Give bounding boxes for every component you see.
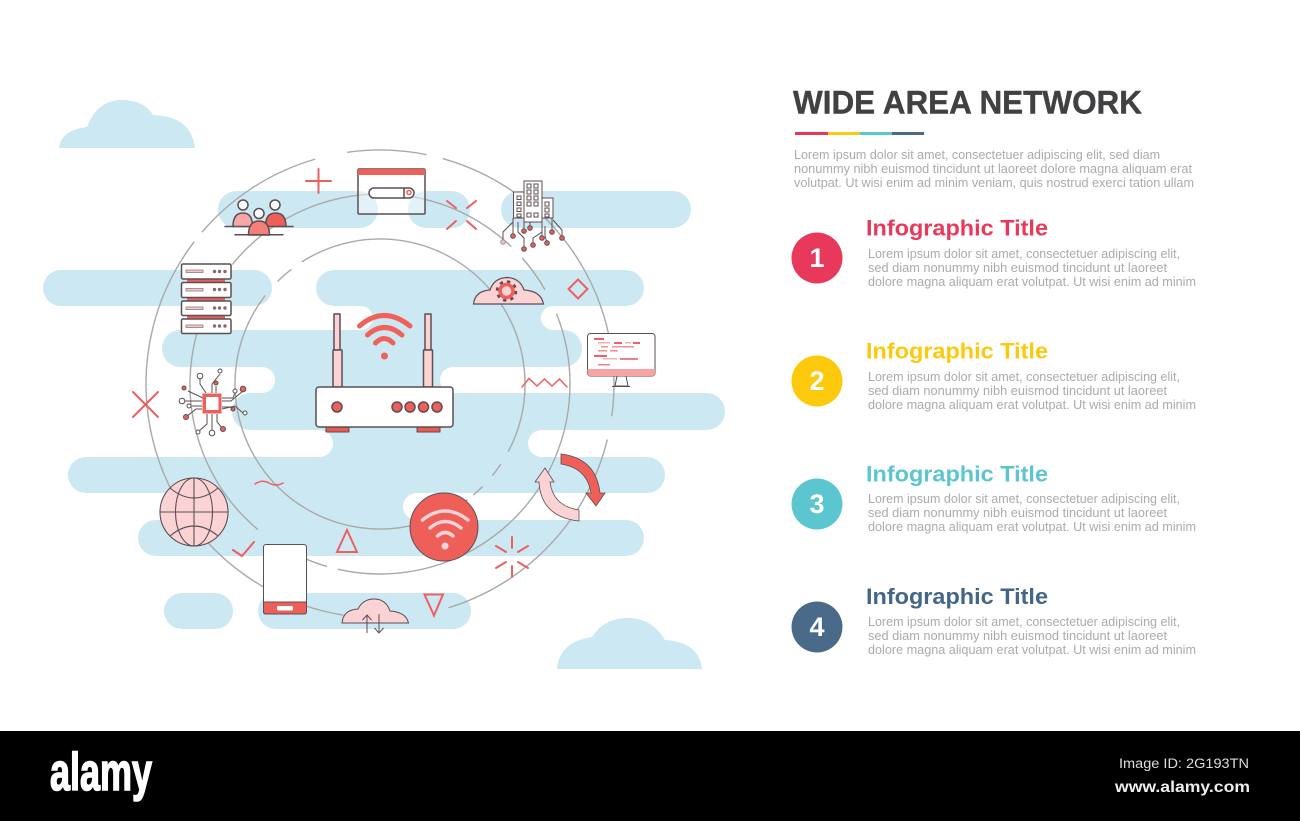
intro text block: Lorem ipsum dolor sit amet, consectetuer adipiscing elit, sed diam — [794, 148, 1160, 162]
number badge 4: 4 — [809, 612, 825, 642]
concentric dashed rings — [97, 101, 663, 667]
intro text block: nonummy nibh euismod tincidunt ut laoreet dolore magna aliquam erat — [794, 162, 1193, 176]
icon: wifi signal above router — [360, 316, 410, 360]
item 3 text: sed diam nonummy nibh euismod tincidunt ut laoreet — [868, 506, 1168, 520]
item 1 — [792, 216, 1196, 289]
icon: microchip — [179, 369, 247, 436]
number badge 4 — [792, 602, 842, 652]
item 2 text: sed diam nonummy nibh euismod tincidunt ut laoreet — [868, 384, 1168, 398]
item 4 heading: Infographic Title — [866, 584, 1048, 609]
icon: monitor with code — [588, 334, 655, 387]
icon: smart city buildings — [501, 181, 564, 251]
icon: cloud with up and down arrows — [342, 599, 408, 633]
number badge 1: 1 — [809, 243, 825, 273]
item 4 text — [868, 615, 1196, 657]
decorative marks: plus, cross, diamond, triangles, squiggles — [133, 169, 588, 616]
item 1 text: Lorem ipsum dolor sit amet, consectetuer adipiscing elit, — [868, 247, 1180, 261]
icon: people group — [225, 200, 293, 235]
item 3 text: Lorem ipsum dolor sit amet, consectetuer adipiscing elit, — [868, 492, 1180, 506]
number badge 2: 2 — [809, 366, 825, 396]
item 1 text: sed diam nonummy nibh euismod tincidunt ut laoreet — [868, 261, 1168, 275]
background: clouds and bands — [43, 100, 738, 669]
icon: cloud with gear — [474, 278, 544, 304]
item 4 text: Lorem ipsum dolor sit amet, consectetuer adipiscing elit, — [868, 615, 1180, 629]
item 1 heading: Infographic Title — [866, 216, 1048, 240]
icon: browser window — [358, 169, 425, 214]
footer bar — [0, 731, 1300, 821]
icon: circular refresh arrows — [535, 454, 605, 521]
item 3 — [792, 462, 1196, 534]
icon: router — [316, 314, 453, 432]
item 2 heading: Infographic Title — [866, 338, 1048, 364]
icon: globe — [160, 478, 228, 546]
item 1 text — [868, 247, 1196, 289]
item 3 text — [868, 492, 1196, 534]
intro text block: volutpat. Ut wisi enim ad minim veniam, quis nostrud exerci tation ullam — [794, 176, 1194, 190]
item 3 heading: Infographic Title — [866, 462, 1048, 486]
item 4 text: dolore magna aliquam erat volutpat. Ut wisi enim ad minim — [868, 643, 1196, 657]
item 3 text: dolore magna aliquam erat volutpat. Ut wisi enim ad minim — [868, 520, 1196, 534]
footer logo: alamy — [50, 743, 152, 802]
item 1 text: dolore magna aliquam erat volutpat. Ut wisi enim ad minim — [868, 275, 1196, 289]
number badge 3 — [792, 478, 842, 530]
intro text block — [794, 148, 1194, 190]
item 4 text: sed diam nonummy nibh euismod tincidunt ut laoreet — [868, 629, 1168, 643]
title underline color bar — [795, 132, 924, 135]
item 2 text — [868, 370, 1196, 412]
number badge 2 — [792, 356, 842, 406]
item 2 text: Lorem ipsum dolor sit amet, consectetuer adipiscing elit, — [868, 370, 1180, 384]
number badge 3: 3 — [809, 489, 825, 519]
footer website: www.alamy.com — [1114, 779, 1250, 796]
item 2 text: dolore magna aliquam erat volutpat. Ut wisi enim ad minim — [868, 398, 1196, 412]
item 4 — [792, 584, 1196, 657]
footer image id: Image ID: 2G193TN — [1119, 756, 1249, 771]
number badge 1 — [792, 232, 842, 284]
icon: wifi circle — [410, 493, 478, 561]
title: WIDE AREA NETWORK — [793, 84, 1142, 120]
item 2 — [792, 338, 1196, 412]
icon: smartphone — [264, 544, 306, 614]
icon: server rack — [182, 264, 231, 334]
